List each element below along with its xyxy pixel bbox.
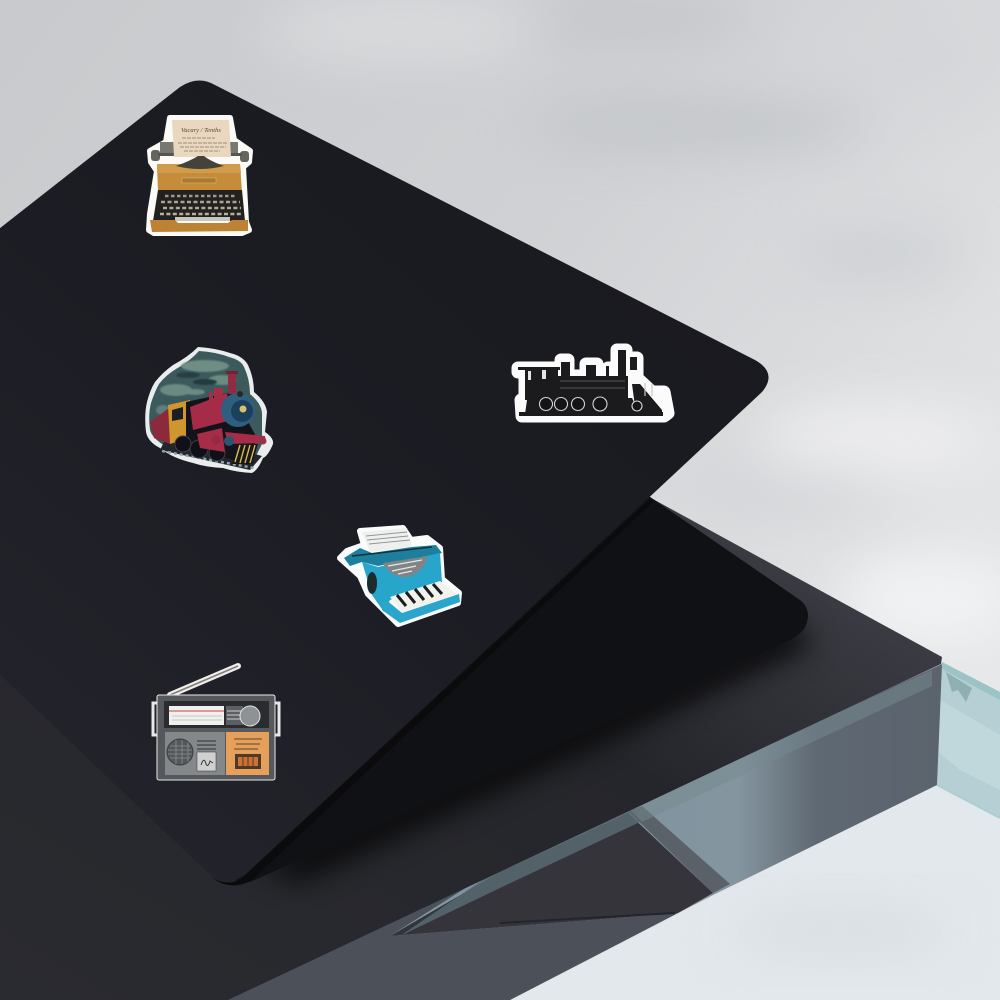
- black table top: [0, 492, 942, 1000]
- side mechanism: [367, 572, 377, 594]
- sticker: retro radio: [153, 666, 279, 780]
- sticker border: [518, 350, 668, 416]
- platen cutout: [383, 556, 428, 577]
- boiler highlight bands: [560, 381, 625, 388]
- side handles: [153, 703, 279, 735]
- train carriages: [150, 400, 190, 444]
- orange panel: [226, 732, 269, 775]
- typewriter carriage: [151, 142, 249, 162]
- sticker: blue typewriter: [340, 528, 460, 624]
- sticker: orange typewriter: [149, 118, 250, 233]
- sticker: black locomotive: [518, 350, 668, 416]
- locomotive wheels: [540, 397, 642, 411]
- glass table edge band: [225, 664, 942, 1000]
- lid lower edge shadow: [212, 499, 654, 886]
- typewriter base: [150, 220, 248, 232]
- locomotive running gear: [175, 392, 258, 462]
- sheet music: [362, 528, 412, 552]
- sticker border: [149, 118, 250, 233]
- cowcatcher lines: [645, 383, 652, 396]
- sticker: red locomotive with smoke: [145, 347, 273, 473]
- sticker border: [340, 528, 459, 624]
- piano keyboard: [382, 581, 460, 623]
- locomotive boiler: [190, 371, 255, 430]
- sticker border: [145, 347, 273, 473]
- glass table leg: [937, 662, 1000, 818]
- locomotive silhouette: [518, 350, 663, 416]
- speaker panel: [165, 732, 225, 775]
- smoke: [149, 351, 262, 468]
- locomotive front: [197, 428, 266, 464]
- laptop base: [230, 490, 808, 882]
- typewriter body: [157, 164, 242, 192]
- keyboard: [153, 190, 245, 221]
- antenna: [170, 666, 238, 695]
- radio body: [157, 695, 275, 780]
- laptop base shadow: [260, 622, 812, 880]
- cab windows: [528, 370, 546, 380]
- tuner panel: [164, 701, 269, 728]
- floor reflection lower right: [510, 783, 1000, 1000]
- track: [160, 430, 262, 470]
- paper: Vacary / Tenths: [181, 127, 221, 134]
- typewriter carriage: [344, 545, 442, 566]
- laptop lid: [0, 80, 769, 882]
- typewriter body: [362, 553, 442, 612]
